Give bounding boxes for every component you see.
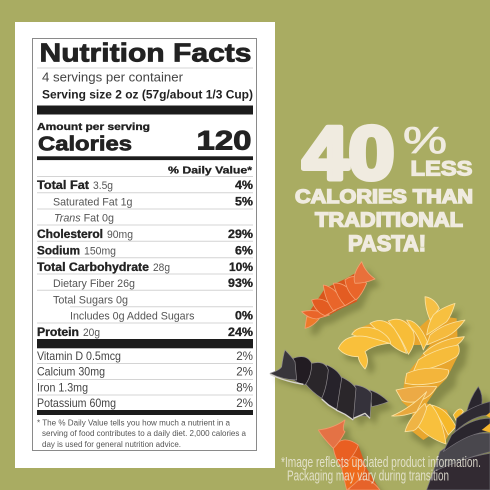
protein: 20g — [83, 327, 100, 339]
vitamin rows: Vitamin D 0.5mcg — [37, 350, 121, 363]
vitamin rows: 8% — [236, 382, 253, 395]
pasta: orange top — [302, 262, 375, 328]
sodium — [37, 246, 253, 258]
saturated fat: 5% — [235, 196, 253, 208]
total sugars: Total Sugars 0g — [53, 294, 128, 306]
total fat: Total Fat — [37, 180, 89, 192]
total carbohydrate — [37, 262, 253, 274]
nutrient rows — [37, 180, 253, 339]
vitamin rows: 2% — [236, 350, 253, 363]
footnote — [37, 418, 246, 449]
footnote: day is used for general nutrition advice. — [42, 439, 181, 449]
pasta: orange bottom — [318, 420, 380, 490]
callout: 40% less calories than traditional pasta: CALORIES THAN — [295, 187, 473, 208]
callout: 40% less calories than traditional pasta: 40 — [302, 111, 394, 195]
vitamin rows: Calcium 30mg — [37, 366, 105, 379]
added sugars: 0% — [235, 311, 253, 323]
sodium: 6% — [235, 246, 253, 258]
sodium: Sodium — [37, 246, 80, 258]
cholesterol: Cholesterol — [37, 229, 103, 241]
dietary fiber — [53, 278, 253, 290]
vitamin rows: Potassium 60mg — [37, 397, 116, 410]
pasta shadows — [275, 268, 490, 490]
callout: 40% less calories than traditional pasta: LESS — [410, 158, 472, 180]
added sugars: Includes 0g Added Sugars — [70, 311, 195, 323]
daily value header: % Daily Value* — [168, 164, 253, 176]
cholesterol: 29% — [228, 229, 253, 241]
callout: 40% less calories than traditional pasta: TRADITIONAL — [315, 208, 463, 232]
callout: 40% less calories than traditional pasta: % — [403, 120, 447, 162]
heading: Nutrition Facts: Nutrition Facts — [40, 38, 252, 68]
total fat — [37, 180, 253, 192]
panel: nutrition label card — [15, 22, 275, 468]
sodium: 150mg — [84, 246, 116, 258]
protein — [37, 327, 253, 339]
cholesterol: 90mg — [107, 229, 133, 241]
footnote: * The % Daily Value tells you how much a nutrient in a — [37, 418, 230, 428]
pasta: dark right — [427, 387, 490, 490]
disclaimer text — [281, 454, 481, 484]
vitamin rows — [37, 350, 253, 410]
vitamin rows: 2% — [236, 397, 253, 410]
protein: 24% — [228, 327, 253, 339]
serving size: Serving size 2 oz (57g/about 1/3 Cup) — [42, 90, 253, 102]
total carbohydrate: Total Carbohydrate — [37, 262, 149, 274]
calories value: 120 — [196, 126, 252, 156]
servings per container: 4 servings per container — [42, 70, 184, 84]
protein: Protein — [37, 327, 79, 339]
vitamin rows: 2% — [236, 366, 253, 379]
footnote: serving of food contributes to a daily diet. 2,000 calories a — [42, 428, 246, 438]
vitamin rows: Iron 1.3mg — [37, 382, 88, 395]
total carbohydrate: 10% — [229, 262, 253, 274]
dietary fiber: 93% — [228, 278, 253, 290]
amount per serving: Amount per serving — [37, 121, 150, 133]
callout: 40% less calories than traditional pasta — [295, 111, 473, 256]
trans fat: Trans Fat 0g — [54, 213, 114, 225]
total carbohydrate: 28g — [153, 262, 170, 274]
pasta: yellow — [338, 297, 465, 444]
calories label: Calories — [38, 134, 132, 156]
cholesterol — [37, 229, 253, 241]
saturated fat: Saturated Fat 1g — [53, 196, 132, 208]
label border — [32, 38, 256, 450]
dietary fiber: Dietary Fiber 26g — [53, 278, 135, 290]
saturated fat — [53, 196, 253, 208]
pasta illustration — [270, 262, 490, 490]
pasta: dark left — [270, 350, 388, 420]
callout: 40% less calories than traditional pasta: PASTA! — [348, 231, 426, 256]
total fat: 4% — [235, 180, 253, 192]
total fat: 3.5g — [93, 180, 113, 192]
